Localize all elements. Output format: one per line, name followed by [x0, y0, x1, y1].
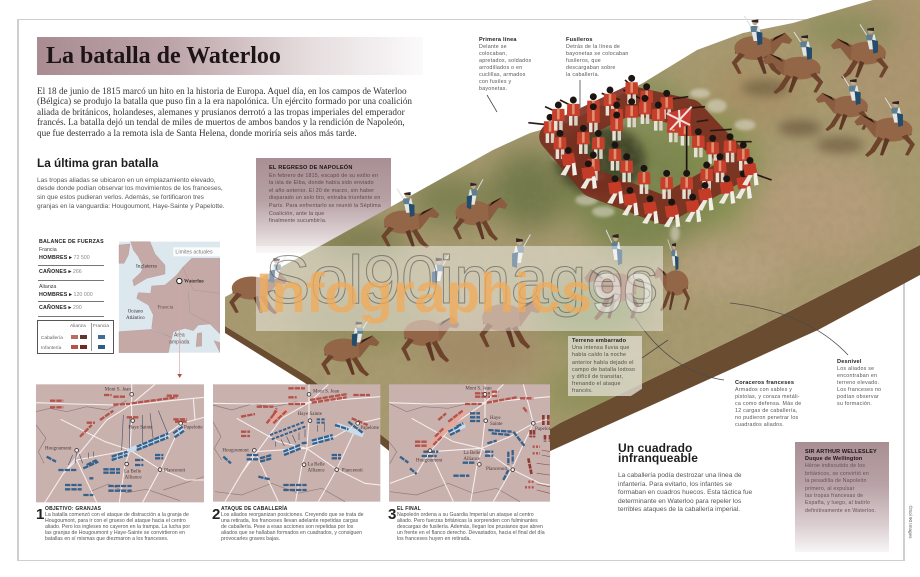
text 2: ATAQUE DE CABALLERÍA	[221, 506, 288, 512]
text 2: provocarles graves bajas.	[221, 536, 280, 542]
label: Fusileros: descargaban sobre	[566, 64, 616, 70]
locator map of western Europe	[118, 241, 220, 378]
text: regreso: En febrero de 1815, escapó de su exilio en	[269, 173, 378, 179]
text 3: un frente en el flanco derecho. Devastados, hacia el final del día	[397, 530, 545, 536]
text: La última gran batalla: sin que estos pudieran verlos. Además, se fortificaron tres	[37, 194, 204, 201]
map 2: ataque de caballería: Hougoumont	[222, 449, 249, 454]
text 3: EL FINAL	[397, 506, 421, 512]
text: Wellesley: Duque de Wellington	[805, 456, 862, 462]
force figures	[39, 239, 104, 261]
heading: Un cuadrado infranqueable	[618, 441, 698, 465]
map 1: objetivo granjas: Hougoumont	[45, 446, 72, 451]
text: Un cuadrado infranqueable: formaban en cuadros huecos. Esta táctica fue	[618, 489, 752, 496]
text: regreso: EL REGRESO DE NAPOLEÓN	[269, 165, 353, 171]
text 3: aliado. Pero fuerzas británicas la sorprenden con fulminantes	[397, 518, 538, 524]
map 2: ataque de caballería: Alliance	[308, 468, 325, 473]
text 1: las granjas de Hougoumont y Haye-Sainte se convirtieron en	[45, 530, 185, 536]
text 1: Hougoumont, para ir con el grueso del ataque hacia el centro	[45, 518, 186, 524]
limits key: Límites actuales	[175, 250, 213, 256]
panel: balance de fuerzas: CAÑONES ▸ 290	[39, 305, 82, 311]
title: La batalla de Waterloo	[46, 43, 281, 69]
text: terreno: frenando el ataque	[572, 381, 621, 387]
callout: Terreno embarrado	[568, 336, 642, 396]
text 1: OBJETIVO: GRANJAS	[45, 506, 101, 512]
text: Wellesley: primero, al expulsar	[805, 486, 855, 492]
text: Un cuadrado infranqueable	[618, 472, 752, 513]
map 3: el final: Hougoumont	[416, 459, 443, 464]
text 3: descargas de fusilería. Además, llegan los prusianos que abren	[397, 524, 543, 530]
panel: Sir Arthur Wellesley	[795, 442, 889, 552]
number 3: 3	[388, 506, 396, 523]
label: Primera línea: Primera línea	[479, 36, 517, 42]
panel: balance de fuerzas: CAÑONES ▸ 266	[39, 269, 82, 275]
map 2: ataque de caballería: Papelotte	[360, 426, 380, 431]
label: Desnivel: encontraban en	[837, 372, 877, 378]
label: Fusileros: Detrás de la línea de	[566, 44, 620, 50]
text: regreso: París. Para enfrentarlo se reunió la Séptima	[269, 203, 381, 209]
text: La última gran batalla: desde donde podían observar los movimientos de los franceses,	[37, 185, 223, 192]
text: regreso	[269, 164, 381, 224]
cavalry: French cuirassiers left	[229, 179, 690, 376]
text 3	[397, 506, 545, 542]
label: Fusileros: la caballería.	[566, 72, 600, 78]
text 2: una retirada, los franceses llevan adelante repetidas cargas	[221, 518, 358, 524]
panel: balance de fuerzas: Alianza	[39, 284, 56, 290]
label: Coraceros franceses: ca como defensa. Más de	[735, 400, 801, 406]
terrain surface	[225, 0, 920, 441]
map 3: el final: Sainte	[490, 422, 503, 427]
label: Desnivel: terreno elevado.	[837, 380, 879, 386]
label: Primera línea: bayonetas.	[479, 86, 507, 92]
intro text: aliada de británicos, holandeses, alemanes y prusianos derrotó a las tropas imperiales del emperador	[37, 107, 405, 117]
map 1: objetivo granjas: La Belle	[124, 470, 142, 475]
place names	[126, 263, 204, 346]
map 2: ataque de caballería: Mont S. Jean	[313, 390, 340, 395]
text: regreso: Coalición, ante la que	[269, 211, 324, 217]
label: Fusileros: bayonetas se colocaban	[566, 50, 629, 56]
caption 2	[212, 505, 364, 542]
text: terreno: y difícil de transitar,	[572, 374, 623, 380]
number 2: 2	[212, 506, 220, 523]
label: Primera línea: arrodillados o en	[479, 64, 522, 70]
text: Wellesley: la pesadilla de Napoleón	[805, 478, 867, 484]
label: Fusileros	[566, 36, 629, 78]
place names: Océano	[128, 310, 143, 315]
infantry square: British soldiers	[528, 75, 772, 227]
map 3: el final: La Belle	[463, 451, 481, 456]
map 3: el final: Alliance	[463, 457, 481, 462]
label: Fusileros: Fusileros	[566, 36, 593, 42]
text 1: aliado. Pero los ingleses no cayeron en la trampa. La lucha por	[45, 524, 190, 530]
force figures: HOMBRES ▸ 72 500	[39, 255, 90, 261]
heading: Un cuadrado infranqueable: Un cuadrado	[618, 441, 692, 455]
map 2: ataque de caballería	[212, 384, 380, 502]
diorama: battlefield terrain with troops	[225, 0, 920, 451]
intro text: francés. La batalla dejó un tendal de miles de muertos de ambos bandos y la rendición de Napoleón,	[37, 117, 405, 127]
label: Fusileros: fusileros, que	[566, 58, 601, 64]
label: Coraceros franceses: Armados con sables y	[735, 386, 792, 392]
label: Primera línea: colocaban,	[479, 50, 507, 56]
map 1: objetivo granjas: Mont S. Jean	[105, 387, 131, 392]
cavalry: French cuirassiers upper right	[732, 16, 915, 157]
label: Primera línea	[479, 36, 531, 92]
map 1: objetivo granjas: Alliance	[125, 476, 142, 481]
text: Wellesley: las tropas francesas de	[805, 493, 863, 499]
text: Un cuadrado infranqueable: La caballería podía destrozar una línea de	[618, 472, 742, 479]
label: Primera línea: Delante se	[479, 44, 507, 50]
text 1: La batalla comenzó con el ataque de distracción a la granja de	[45, 512, 189, 518]
legend: Caballería	[41, 336, 63, 341]
text: Wellesley: definitivamente en Waterloo.	[805, 508, 876, 514]
text: regreso: el año anterior. El 20 de marzo, sin haber	[269, 188, 374, 194]
text: Un cuadrado infranqueable: determinante en Waterloo para repeler los	[618, 498, 741, 505]
place names: ampliada	[169, 340, 190, 346]
arrow to battle maps	[177, 285, 182, 378]
text 2: Los aliados reorganizan posiciones. Creyendo que se trata de	[221, 512, 363, 518]
label: Primera línea: con fusiles y	[479, 78, 511, 84]
legend: Francia	[93, 324, 109, 329]
text: La última gran batalla: Las tropas aliadas se ubicaron en un emplazamiento elevado,	[37, 176, 216, 184]
intro text	[37, 86, 412, 138]
map 2: ataque de caballería: La Belle	[308, 462, 326, 467]
map 3: el final: Haye	[490, 416, 501, 421]
label: Primera línea: apretados, soldados	[479, 58, 531, 64]
text: Wellesley: británicos, se convirtió en	[805, 471, 869, 477]
text: terreno: había caído la noche	[572, 352, 626, 358]
label: Desnivel	[837, 358, 881, 406]
map 1: objetivo granjas: Plancenoit	[164, 468, 186, 473]
label: Desnivel: Los aliados se	[837, 366, 874, 372]
place names: Inglaterra	[136, 263, 157, 269]
label: Primera línea: cuclillas, armados	[479, 72, 526, 78]
text: Un cuadrado infranqueable: infantería. Para evitarlo, los infantes se	[618, 481, 732, 488]
watermark: Infographics90	[256, 261, 654, 324]
place names: Francia	[157, 304, 174, 310]
heading: Un cuadrado infranqueable: infranqueable	[618, 451, 698, 465]
force figures: Francia	[39, 247, 57, 253]
text 1: batallas en sí mismas que diezmaron a los franceses.	[45, 536, 168, 542]
legend: Infantería	[41, 346, 61, 351]
panel: El regreso de Napoleón	[256, 158, 391, 253]
text: Un cuadrado infranqueable: terribles ataques de la caballería imperial.	[618, 506, 740, 513]
credit: ©Sol 90 Images	[908, 506, 913, 538]
caption 1	[36, 506, 190, 542]
text: terreno	[572, 338, 635, 392]
intro text: El 18 de junio de 1815 marcó un hito en la historia de Europa. Aquel día, en los campos de Waterloo	[37, 86, 407, 96]
label: Coraceros franceses	[735, 380, 801, 428]
text 2	[221, 505, 364, 542]
text: terreno: Una intensa lluvia que	[572, 345, 630, 351]
intro text: (Bélgica) se produjo la batalla que puso fin a la era napolónica. Un ejército formado por una coalición	[37, 96, 412, 106]
label: Coraceros franceses: 12 cargas de caballería,	[735, 408, 798, 414]
map 1: objetivo granjas: Papelotte	[184, 426, 203, 431]
map 2: ataque de caballería: Plancenoit	[342, 468, 363, 473]
text: terreno: campo de batalla lodoso	[572, 367, 635, 373]
force figures: BALANCE DE FUERZAS	[39, 239, 104, 245]
label: Desnivel: su formación.	[837, 400, 872, 406]
panel: title band	[37, 37, 423, 75]
text: La última gran batalla	[37, 176, 225, 210]
map 3: el final: Plancenoit	[486, 467, 508, 472]
text: terreno: francés.	[572, 388, 593, 394]
text 2: de caballería. Pese a esas acciones son repelidas por los	[221, 524, 353, 530]
place names: Área	[174, 331, 185, 338]
intro text: que fue desterrado a la remota isla de Santa Helena, donde moriría seis años más tarde.	[37, 128, 357, 138]
text: terreno: Terreno embarrado	[572, 338, 626, 344]
place names: Atlántico	[126, 316, 145, 321]
caption 3	[388, 506, 545, 542]
map 1: objetivo granjas: Haye Sainte	[128, 426, 153, 431]
leader lines	[487, 80, 848, 380]
legend	[37, 320, 114, 354]
label: Coraceros franceses: no pudieron penetrar los	[735, 414, 798, 420]
panel: balance de fuerzas	[38, 239, 104, 317]
map 3: el final: Mont S. Jean	[465, 386, 492, 391]
text 2: aliados que se hallaban formados en cuadrados, y consiguen	[221, 530, 362, 536]
map 3: el final	[388, 384, 550, 502]
text: terreno: anterior había dejado el	[572, 360, 634, 366]
label: Coraceros franceses: cuadrados aliados.	[735, 422, 784, 428]
number 1: 1	[36, 506, 44, 523]
text: Wellesley: SIR ARTHUR WELLESLEY	[805, 448, 877, 454]
text 1	[45, 506, 190, 542]
text: Wellesley	[805, 448, 877, 514]
panel: balance de fuerzas: HOMBRES ▸ 120 000	[39, 292, 93, 298]
smoke puffs	[551, 89, 756, 241]
text 3: los franceses huyen en retirada.	[397, 536, 471, 542]
text: Wellesley: España, y luego, al batirlo	[805, 500, 870, 506]
text: regreso: finalmente sucumbiría.	[269, 218, 327, 224]
label: Desnivel: podían observar	[837, 394, 879, 400]
text: regreso: disparado un solo tiro, entraba triunfante en	[269, 195, 380, 201]
label: Desnivel: Los franceses no	[837, 386, 881, 392]
text: regreso: la isla de Elba, donde había sido enviado	[269, 180, 374, 186]
text: La última gran batalla: granjas en la vanguardia: Hougoumont, Haye-Sainte y Papelotte.	[37, 203, 225, 210]
text 3: Napoleón ordena a su Guardia Imperial un ataque al centro	[397, 512, 534, 518]
map 1: objetivo granjas	[36, 384, 204, 502]
map 2: ataque de caballería: Haye Sainte	[298, 412, 323, 417]
text: Wellesley: Héroe indiscutido de los	[805, 463, 865, 469]
legend: Alianza	[70, 324, 86, 329]
flag	[667, 107, 692, 130]
heading: La última gran batalla: La última gran batalla	[37, 156, 158, 170]
place names: Waterloo	[184, 280, 204, 285]
label: Coraceros franceses: pistolas, y coraza metáli-	[735, 394, 800, 400]
label: Coraceros franceses: Coraceros franceses	[735, 380, 794, 386]
label: Desnivel: Desnivel	[837, 358, 862, 364]
terrain side band	[225, 245, 920, 500]
